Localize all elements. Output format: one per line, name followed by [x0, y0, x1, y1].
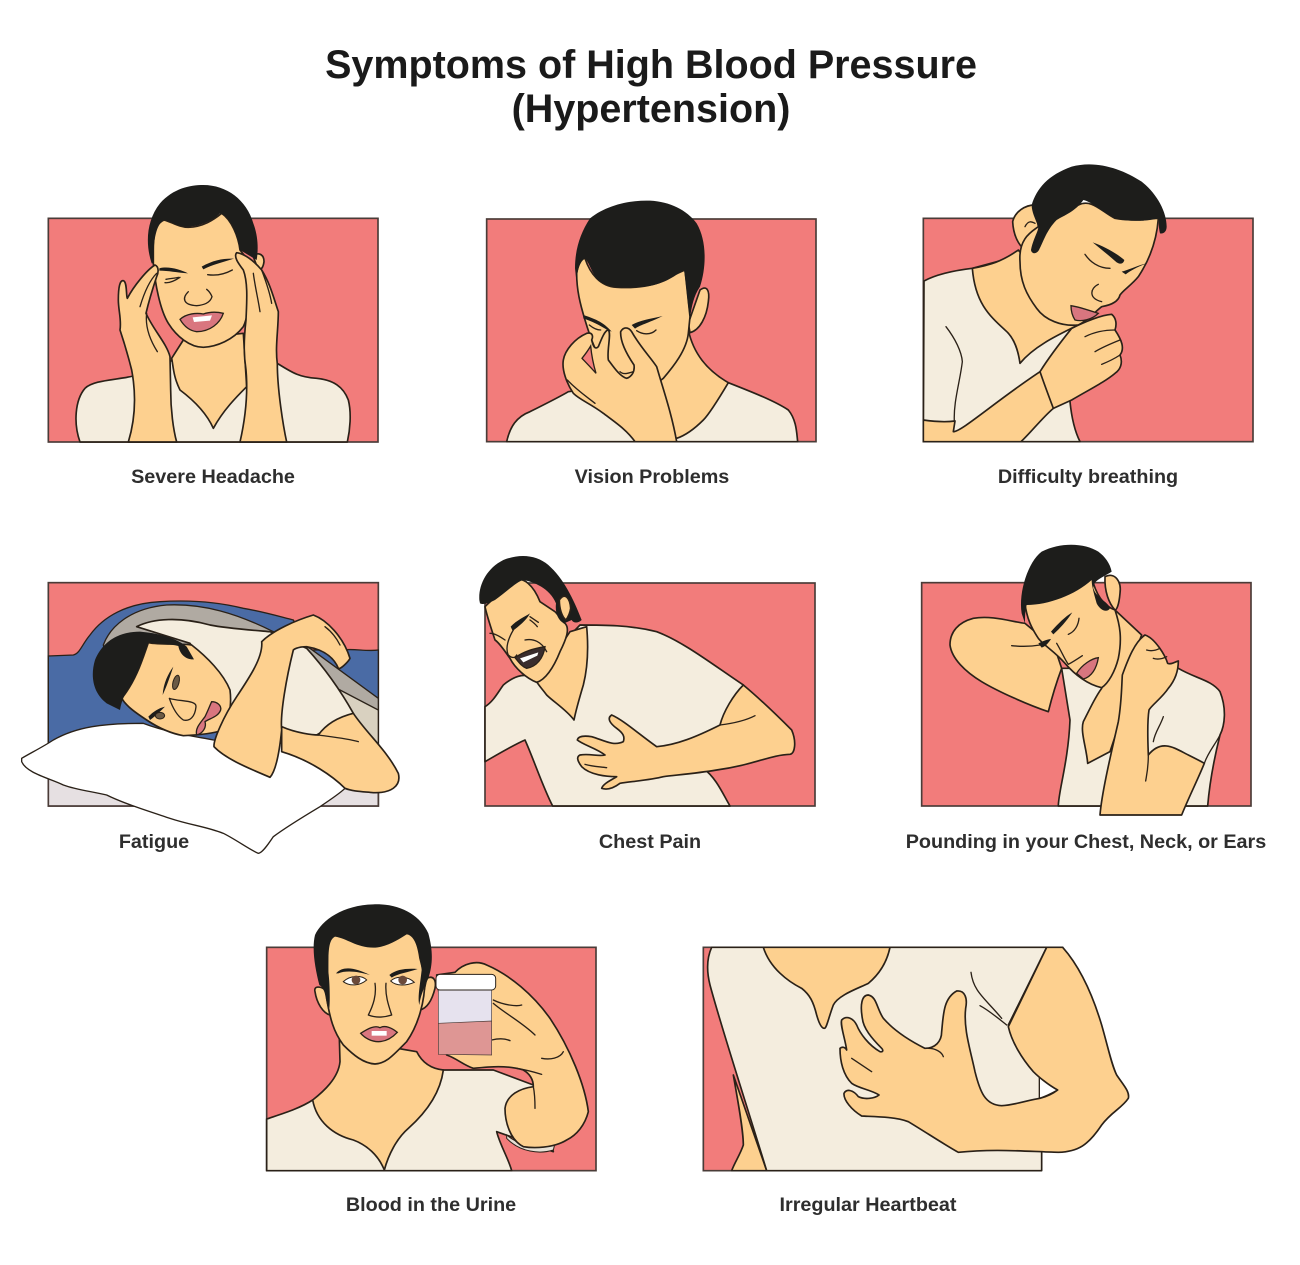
face [485, 579, 567, 682]
shirt [708, 947, 1063, 1171]
face [1025, 577, 1120, 688]
ears [315, 977, 435, 1015]
fist [1040, 314, 1122, 408]
arm crease [318, 627, 358, 742]
label: blood in the urine: Blood in the Urine [346, 1194, 516, 1216]
hair [314, 904, 432, 1008]
hair [479, 556, 582, 623]
panel background [48, 583, 378, 806]
hair [1021, 545, 1112, 623]
hair [575, 201, 705, 318]
neck [660, 330, 728, 438]
eyebrows and eyes [583, 315, 663, 334]
label: vision problems: Vision Problems [575, 466, 729, 488]
forearm [282, 713, 399, 793]
neck [313, 1038, 443, 1170]
face [153, 213, 253, 347]
arm and hand holding cup [437, 963, 588, 1148]
hair [93, 632, 194, 710]
lower sheet [48, 757, 378, 806]
shirt [923, 255, 1080, 442]
facial features [1012, 612, 1098, 679]
face [327, 933, 425, 1064]
fabric and finger lines [1146, 648, 1220, 781]
label: pounding: Pounding in your Chest, Neck, or Ears [906, 831, 1266, 853]
shirt [267, 1070, 553, 1171]
grey blanket lining [103, 605, 378, 737]
panel background [923, 218, 1253, 442]
sleeve shadow [507, 1135, 555, 1152]
shirt [1058, 668, 1224, 806]
upper arm and hand [214, 615, 350, 777]
panel background [267, 947, 596, 1171]
title: Symptoms of High Blood Pressure [325, 43, 977, 87]
forearm and hand on neck [1100, 635, 1204, 815]
pillow [22, 723, 345, 853]
hand over nose [563, 328, 677, 442]
neck [1082, 610, 1142, 763]
shirt [137, 620, 353, 737]
ear [253, 254, 264, 270]
arm and hand on chest [577, 685, 795, 789]
pale sheet corner [340, 690, 378, 757]
finger lines [1085, 330, 1120, 364]
facial features [336, 968, 418, 1042]
sleeve line [946, 327, 962, 422]
neck [972, 250, 1078, 363]
label: severe headache: Severe Headache [131, 466, 295, 488]
finger lines [567, 372, 633, 403]
left hand [118, 265, 177, 442]
torso skin [732, 1075, 767, 1171]
hair [148, 185, 258, 263]
face [122, 643, 231, 736]
shirt [485, 625, 743, 806]
ear [559, 596, 571, 620]
facial features [490, 613, 547, 668]
facial features [1025, 222, 1147, 321]
raised arm [950, 617, 1062, 712]
panel background [487, 219, 816, 442]
arm crease [585, 716, 755, 768]
panel: pounding in chest, neck or ears [922, 545, 1251, 815]
label: fatigue: Fatigue [119, 831, 189, 853]
panel: fatigue [22, 583, 399, 853]
panel: severe headache [48, 185, 378, 442]
right hand [236, 253, 287, 442]
facial features [148, 667, 221, 735]
forearm [923, 372, 1068, 442]
fabric and finger lines [852, 972, 1007, 1072]
title: (Hypertension) [512, 87, 790, 131]
pink gap between fingers [582, 346, 596, 373]
panel: vision problems [487, 201, 816, 442]
neck [763, 947, 890, 1028]
panel background [922, 583, 1251, 806]
neck [172, 333, 247, 428]
label: chest pain: Chest Pain [599, 831, 701, 853]
title [325, 43, 977, 131]
blue blanket [48, 601, 378, 760]
white gap [1039, 1077, 1058, 1098]
arm and hand [840, 947, 1129, 1152]
panel: difficulty breathing [923, 164, 1253, 442]
panel: blood in the urine [267, 904, 596, 1171]
panel background [485, 583, 815, 806]
label: difficulty breathing: Difficulty breathing [998, 466, 1178, 488]
shirt [76, 360, 350, 442]
finger lines [140, 270, 272, 352]
hair [1031, 164, 1167, 253]
ear [1013, 205, 1038, 250]
hand lines [492, 1000, 563, 1108]
pink background sliver [703, 947, 778, 1171]
face [1020, 203, 1158, 325]
panel: chest pain [479, 556, 815, 806]
face [577, 258, 690, 384]
ear [1105, 575, 1120, 610]
facial features [159, 259, 234, 332]
label: irregular heartbeat: Irregular Heartbeat [780, 1194, 957, 1216]
shirt [507, 380, 798, 442]
ear [688, 288, 709, 333]
panel: irregular heartbeat [703, 947, 1129, 1171]
panel background [48, 218, 378, 442]
neck [537, 627, 588, 720]
urine specimen cup [436, 974, 496, 1055]
